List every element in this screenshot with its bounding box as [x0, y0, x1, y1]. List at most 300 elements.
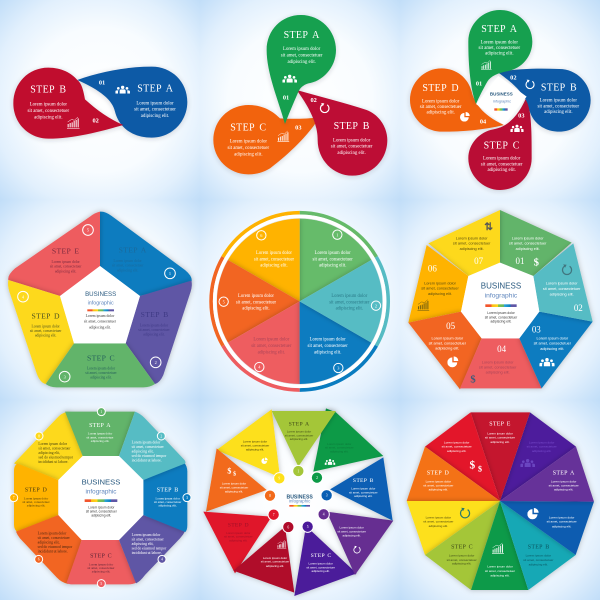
text: step B: sit amet, consectetuer	[349, 490, 378, 494]
panel: octagon	[10, 408, 191, 588]
text: 07: adipiscing elit.	[460, 247, 484, 251]
center: sit amet, consectetuer	[84, 320, 117, 325]
text: step C: sit amet, consectetuer	[227, 146, 270, 151]
text: step B: adipiscing elit.	[337, 151, 366, 156]
icon: refresh	[461, 508, 470, 518]
text: step D: Lorem ipsum dolor	[422, 99, 460, 104]
text: purple block: sit amet, consectetuer	[132, 537, 165, 542]
text: 01: Lorem ipsum dolor	[512, 237, 544, 241]
segment teal	[119, 412, 185, 480]
number badges: 8	[269, 494, 271, 498]
panel: triangles star	[203, 408, 393, 596]
number badges: 1	[297, 469, 299, 473]
text: violet: Lorem ipsum dolor	[529, 440, 554, 444]
text: 07: Lorem ipsum dolor	[456, 237, 488, 241]
text: green: sit amet, consectetuer	[485, 569, 515, 573]
text: step C: sit amet, consectetuer	[481, 162, 523, 167]
text: green: Lorem ipsum dolor	[327, 442, 351, 446]
number badges: 3	[186, 496, 188, 500]
teardrop: step A green	[267, 15, 336, 124]
number badges	[18, 225, 175, 382]
text: 06: Lorem ipsum dolor	[424, 281, 457, 285]
number badges	[10, 408, 191, 588]
panel: two-step teardrops	[13, 67, 187, 139]
segment purple	[119, 515, 185, 583]
center label: infographic	[493, 100, 511, 104]
text: step B: STEP B	[528, 544, 550, 550]
number badges: 7	[273, 513, 275, 517]
text: step B: Lorem ipsum dolor	[351, 487, 375, 491]
segment D yellow	[8, 280, 74, 384]
text: step E: sit amet, consectetuer	[50, 265, 82, 270]
text: yellow block: incididunt ut labore.	[38, 460, 68, 464]
teardrop: step B crimson	[297, 90, 387, 176]
text: step C: STEP C	[87, 353, 115, 362]
text: step C: adipiscing elit.	[92, 570, 110, 574]
text: step D: STEP D	[31, 311, 60, 320]
text: slice 6: adipiscing elit.	[260, 264, 288, 269]
number badges: 8	[38, 434, 40, 438]
text: step A: adipiscing elit.	[290, 437, 308, 441]
text: slice 6: Lorem ipsum dolor	[256, 251, 292, 256]
text: step A: sit amet, consectetuer	[112, 264, 144, 269]
segment green	[65, 412, 135, 456]
number badges: 7	[13, 496, 15, 500]
icon: refresh	[563, 264, 572, 275]
text: step C: Lorem ipsum dolor	[449, 554, 474, 558]
teardrop: step A blue	[77, 67, 187, 138]
text: step D: STEP D	[422, 83, 459, 94]
number badges: 1	[100, 410, 102, 414]
text: blue: Lorem ipsum dolor	[549, 515, 574, 519]
text: dark red: Lorem ipsum dolor	[263, 556, 287, 560]
text: step B: Lorem ipsum dolor	[155, 496, 181, 500]
icon: chart	[481, 60, 492, 70]
text: step A: sit amet, consectetuer	[285, 433, 313, 437]
text: green: Lorem ipsum dolor	[487, 565, 513, 569]
text: step D: adipiscing elit.	[429, 488, 448, 492]
white ring	[215, 216, 385, 386]
center: infographic	[86, 489, 116, 496]
text: step B: sit amet, consectetuer	[331, 145, 373, 150]
text: step A: Lorem ipsum dolor	[551, 479, 576, 483]
text: step E: STEP E	[52, 247, 79, 256]
text: step C: STEP C	[311, 553, 331, 559]
text: yellow block: adipiscing elit,	[38, 451, 60, 456]
number 02: 02	[510, 74, 516, 81]
number badges: 1	[169, 271, 171, 276]
text: step A: STEP A	[481, 24, 518, 35]
text: teal block: incididunt ut labore.	[132, 459, 162, 463]
segment blue	[143, 463, 187, 532]
icon: chart	[277, 131, 289, 142]
text: slice 4: sit amet, consectetuer	[251, 344, 292, 349]
segment coral	[67, 540, 136, 584]
text: orange: Lorem ipsum dolor	[222, 482, 246, 486]
slice yellow	[407, 501, 500, 555]
text: step A: Lorem ipsum dolor	[283, 47, 321, 52]
center: BUSINESS	[82, 478, 120, 487]
text: yellow block: sit amet, consectetuer	[38, 446, 71, 451]
number badges: 4	[258, 365, 261, 370]
text: step C: Lorem ipsum dolor	[87, 367, 116, 371]
text: slice 3: Lorem ipsum dolor	[310, 338, 346, 343]
segment 04 coral	[460, 338, 542, 388]
center: BUSINESS	[481, 281, 521, 290]
text: step D: Lorem ipsum dolor	[32, 325, 61, 329]
text: step B: sit amet, consectetuer	[537, 104, 580, 109]
text: step B: sit amet, consectetuer	[27, 109, 70, 114]
text: teal block: sed do eiusmod tempor	[132, 454, 167, 458]
text: step A: sit amet, consectetuer	[478, 46, 521, 51]
text: step D: Lorem ipsum dolor	[24, 496, 49, 500]
text: yellow: sit amet, consectetuer	[241, 443, 269, 447]
text: slice 5: Lorem ipsum dolor	[238, 294, 274, 299]
number badges: 4	[22, 294, 25, 299]
center	[60, 266, 140, 343]
text: step D: STEP D	[427, 470, 449, 476]
text: step B: sit amet, consectetuer	[523, 558, 553, 562]
number badges: 5	[87, 228, 89, 233]
number badges	[219, 230, 381, 373]
center: adipiscing elit.	[89, 325, 111, 329]
text: step B: STEP B	[541, 82, 577, 93]
center label	[476, 76, 527, 125]
triangle red	[203, 512, 272, 573]
icon: dollars: $	[469, 459, 475, 471]
slice red	[425, 412, 500, 501]
number badges: 2	[375, 303, 377, 308]
text: step A: STEP A	[89, 423, 111, 429]
text: step A: STEP A	[553, 470, 575, 476]
center label: infographic	[289, 499, 311, 504]
text: step C: adipiscing elit.	[234, 152, 263, 157]
teardrop: step B blue	[497, 69, 591, 132]
text: step A: adipiscing elit.	[91, 439, 109, 443]
text: step B: Lorem ipsum dolor	[140, 323, 169, 327]
text: step C: STEP C	[484, 141, 520, 152]
text: slice 2: adipiscing elit.	[336, 307, 363, 312]
icon: chart	[277, 540, 286, 549]
number 01: 01	[476, 81, 482, 88]
number badges: 2	[155, 360, 157, 365]
icon: people	[325, 459, 335, 465]
text: 01: adipiscing elit.	[516, 247, 540, 251]
number 03: 03	[518, 112, 524, 119]
triangle purple	[327, 512, 393, 575]
teardrop: step D orange	[410, 68, 504, 132]
text: orange block: Lorem ipsum dolor	[38, 532, 67, 536]
text: dark red: adipiscing elit.	[266, 564, 284, 568]
text: step A: adipiscing elit.	[287, 60, 316, 65]
text: 02: adipiscing elit.	[550, 292, 574, 296]
text: slice 1: Lorem ipsum dolor	[315, 251, 351, 256]
text: orange: sit amet, consectetuer	[220, 485, 248, 489]
text: step A: STEP A	[284, 30, 320, 41]
text: 04: sit amet, consectetuer	[479, 365, 517, 369]
numbers: 07	[474, 256, 484, 266]
center: Lorem ipsum dolor	[487, 311, 516, 315]
triangle yellow	[217, 409, 280, 477]
text: purple: Lorem ipsum dolor	[340, 526, 364, 530]
number badges: 6	[287, 525, 289, 529]
number badges: 9	[278, 477, 280, 481]
center: adipiscing elit.	[491, 320, 512, 324]
text: step D: sit amet, consectetuer	[423, 484, 453, 488]
text: slice 4: Lorem ipsum dolor	[253, 338, 290, 343]
text: slice 2: Lorem ipsum dolor	[331, 294, 368, 299]
text: slice 5: adipiscing elit.	[242, 307, 270, 312]
center: BUSINESS	[85, 291, 116, 298]
teardrop: step A green	[468, 10, 532, 104]
text: purple block: Lorem ipsum dolor	[132, 533, 161, 537]
slice violet	[500, 412, 576, 501]
number badges: 5	[223, 299, 225, 304]
number badges: 4	[323, 513, 325, 517]
text: step A: adipiscing elit.	[141, 114, 169, 119]
text: step D: adipiscing elit.	[229, 538, 248, 542]
numbers: 06	[428, 263, 437, 273]
panel: pentagon	[8, 212, 192, 387]
text: step B: adipiscing elit.	[34, 115, 63, 120]
center label	[286, 494, 313, 507]
icon: refresh	[526, 80, 534, 89]
text: slice 4: adipiscing elit.	[258, 350, 285, 355]
icon: dollar coral: $	[470, 375, 476, 386]
number 04: 04	[480, 119, 487, 126]
text: step B: Lorem ipsum dolor	[30, 102, 67, 107]
text: blue: sit amet, consectetuer	[547, 520, 577, 524]
slice orange	[407, 447, 500, 501]
text: 06: sit amet, consectetuer	[421, 286, 459, 290]
text: step C: Lorem ipsum dolor	[309, 562, 333, 566]
text: orange block: incididunt ut labore.	[38, 550, 68, 554]
text: step B: Lorem ipsum dolor	[526, 554, 551, 558]
text: step A: Lorem ipsum dolor	[88, 432, 113, 436]
icon: dollars: $	[478, 465, 482, 474]
text: step A: adipiscing elit.	[117, 268, 139, 272]
icon: pie	[460, 112, 470, 122]
text: step A: STEP A	[289, 421, 310, 427]
text: step A: Lorem ipsum dolor	[481, 40, 518, 45]
center label: BUSINESS	[490, 92, 513, 97]
segment orange	[16, 515, 82, 584]
number badges	[264, 465, 332, 533]
numbers: 03	[532, 325, 541, 335]
numbers: 04	[497, 344, 507, 354]
segment E coral	[8, 212, 100, 296]
text: step C: STEP C	[451, 544, 473, 550]
text: 03: sit amet, consectetuer	[534, 342, 572, 346]
center: sit amet, consectetuer	[485, 315, 518, 319]
center	[461, 263, 539, 338]
icon: dollar green: $	[534, 257, 540, 268]
slice green	[471, 501, 528, 590]
text: yellow: sit amet, consectetuer	[423, 520, 453, 524]
text: 02: Lorem ipsum dolor	[546, 282, 578, 286]
icon: people	[510, 125, 524, 132]
text: step D: adipiscing elit.	[27, 504, 45, 508]
text: red: Lorem ipsum dolor	[444, 440, 469, 444]
text: purple: adipiscing elit.	[342, 534, 361, 538]
text: orange block: sit amet, consectetuer	[38, 536, 71, 541]
icon: people	[539, 358, 555, 366]
text: step C: Lorem ipsum dolor	[230, 140, 267, 145]
text: 03: Lorem ipsum dolor	[536, 337, 569, 341]
slice 1 green	[300, 219, 371, 301]
text: orange: adipiscing elit.	[225, 489, 243, 493]
slice 3 blue	[300, 301, 371, 384]
text: step C: STEP C	[90, 554, 112, 560]
number badges: 5	[307, 525, 309, 529]
text: step B: STEP B	[334, 121, 370, 132]
text: step B: Lorem ipsum dolor	[540, 99, 577, 104]
text: step B: adipiscing elit.	[143, 333, 165, 337]
panel: four-step teardrops	[410, 10, 591, 190]
numbers: 01	[515, 256, 524, 266]
triangle violet	[294, 526, 357, 596]
segment 07 yellow	[428, 210, 500, 276]
segment yellow	[14, 412, 83, 480]
text: yellow block: Lorem ipsum dolor	[38, 442, 68, 446]
text: step C: adipiscing elit.	[487, 168, 516, 173]
text: step E: adipiscing elit.	[55, 269, 77, 273]
numbers: 05	[446, 321, 456, 331]
text: yellow: Lorem ipsum dolor	[426, 515, 451, 519]
number 02: 02	[310, 97, 317, 104]
segment A blue	[100, 212, 192, 296]
text: step C: sit amet, consectetuer	[87, 566, 116, 571]
text: step B: sit amet, consectetuer	[138, 328, 171, 333]
text: slice 3: adipiscing elit.	[314, 350, 341, 355]
text: 04: adipiscing elit.	[486, 371, 510, 375]
text: 05: Lorem ipsum dolor	[431, 336, 464, 340]
number badges: 3	[326, 494, 328, 498]
text: step C: adipiscing elit.	[311, 569, 330, 573]
icon: chart	[417, 300, 429, 311]
slice teal	[500, 501, 576, 590]
text: step C: sit amet, consectetuer	[447, 558, 477, 562]
triangle orange	[206, 448, 267, 512]
text: purple block: sed do eiusmod tempor	[132, 546, 167, 550]
text: violet: adipiscing elit.	[532, 449, 551, 453]
numbers: 02	[574, 303, 583, 313]
text: step D: sit amet, consectetuer	[224, 535, 253, 539]
slice purple	[500, 447, 594, 502]
text: step B: STEP B	[141, 310, 169, 319]
teardrop: step B red	[13, 68, 123, 139]
text: step C: Lorem ipsum dolor	[483, 157, 521, 162]
segment 02 teal	[533, 243, 593, 322]
slice olive	[425, 501, 500, 590]
number badges: 3	[64, 374, 66, 379]
text: red: adipiscing elit.	[447, 449, 466, 453]
text: step D: Lorem ipsum dolor	[426, 479, 451, 483]
text: step D: Lorem ipsum dolor	[226, 531, 250, 535]
text: teal block: sit amet, consectetuer	[132, 445, 165, 450]
text: 03: adipiscing elit.	[540, 347, 564, 351]
text: step A: sit amet, consectetuer	[549, 484, 579, 488]
center label: BUSINESS	[286, 494, 313, 500]
text: purple: sit amet, consectetuer	[337, 529, 366, 533]
text: step D: adipiscing elit.	[426, 111, 455, 116]
text: step C: STEP C	[230, 122, 266, 133]
text: orange block: adipiscing elit,	[38, 541, 60, 546]
text: step C: adipiscing elit.	[90, 376, 112, 380]
text: 04: Lorem ipsum dolor	[482, 360, 514, 364]
triangle blue	[330, 457, 393, 521]
slice blue	[500, 501, 594, 555]
center: adipiscing elit.	[91, 513, 111, 517]
icon: chart	[67, 117, 80, 129]
icon: people	[282, 75, 297, 83]
center: Lorem ipsum dolor	[88, 505, 114, 509]
text: slice 1: sit amet, consectetuer	[313, 257, 353, 262]
icon: arrows: ⇅	[484, 221, 493, 233]
icon: refresh	[354, 546, 360, 553]
text: step D: sit amet, consectetuer	[22, 500, 51, 505]
number badges: 4	[161, 558, 163, 562]
text: green: adipiscing elit.	[490, 573, 510, 577]
number badges: 6	[38, 558, 40, 562]
text: 06: adipiscing elit.	[428, 292, 452, 296]
text: step C: adipiscing elit.	[452, 562, 471, 566]
number 02: 02	[92, 117, 99, 124]
teardrop: step C crimson	[468, 97, 532, 190]
text: purple block: adipiscing elit,	[132, 542, 154, 547]
triangle dark red	[233, 527, 294, 593]
slice 4 coral	[228, 301, 300, 384]
center: sit amet, consectetuer	[86, 509, 117, 513]
text: step C: sit amet, consectetuer	[85, 371, 118, 376]
text: step A: sit amet, consectetuer	[281, 54, 323, 59]
icon: people	[520, 459, 535, 467]
number badges: 2	[160, 434, 162, 438]
text: slice 1: adipiscing elit.	[319, 264, 346, 269]
segment B purple	[126, 281, 192, 384]
text: violet: sit amet, consectetuer	[527, 445, 557, 449]
text: step D: sit amet, consectetuer	[30, 329, 62, 334]
text: yellow: adipiscing elit.	[246, 447, 264, 451]
slice 5 orange	[217, 260, 300, 343]
icon: pie	[447, 356, 458, 367]
triangle green	[313, 408, 383, 472]
text: step A: STEP A	[119, 246, 147, 255]
text: step A: sit amet, consectetuer	[86, 435, 115, 440]
icon: dollars: $	[233, 470, 236, 477]
slice 2 teal	[300, 260, 382, 343]
text: step B: STEP B	[30, 85, 66, 96]
text: red: sit amet, consectetuer	[442, 445, 472, 449]
slice 6 amber	[228, 219, 300, 301]
icon: chart	[492, 543, 504, 554]
number 03: 03	[295, 125, 301, 132]
text: green: sit amet, consectetuer	[325, 446, 354, 450]
text: step C: sit amet, consectetuer	[306, 565, 335, 569]
number badges: 1	[336, 232, 338, 237]
text: teal block: adipiscing elit,	[132, 450, 154, 455]
text: step A: sit amet, consectetuer	[134, 108, 176, 113]
segment 03 blue	[519, 312, 593, 388]
text: step A: Lorem ipsum dolor	[114, 259, 143, 263]
text: step B: STEP B	[353, 478, 374, 484]
text: step E: Lorem ipsum dolor	[487, 431, 513, 435]
text: yellow: adipiscing elit.	[429, 524, 448, 528]
icon: dollars: $	[227, 466, 231, 475]
text: purple block: incididunt ut labore.	[132, 551, 162, 555]
text: step B: Lorem ipsum dolor	[333, 138, 371, 143]
text: 07: sit amet, consectetuer	[453, 242, 491, 246]
